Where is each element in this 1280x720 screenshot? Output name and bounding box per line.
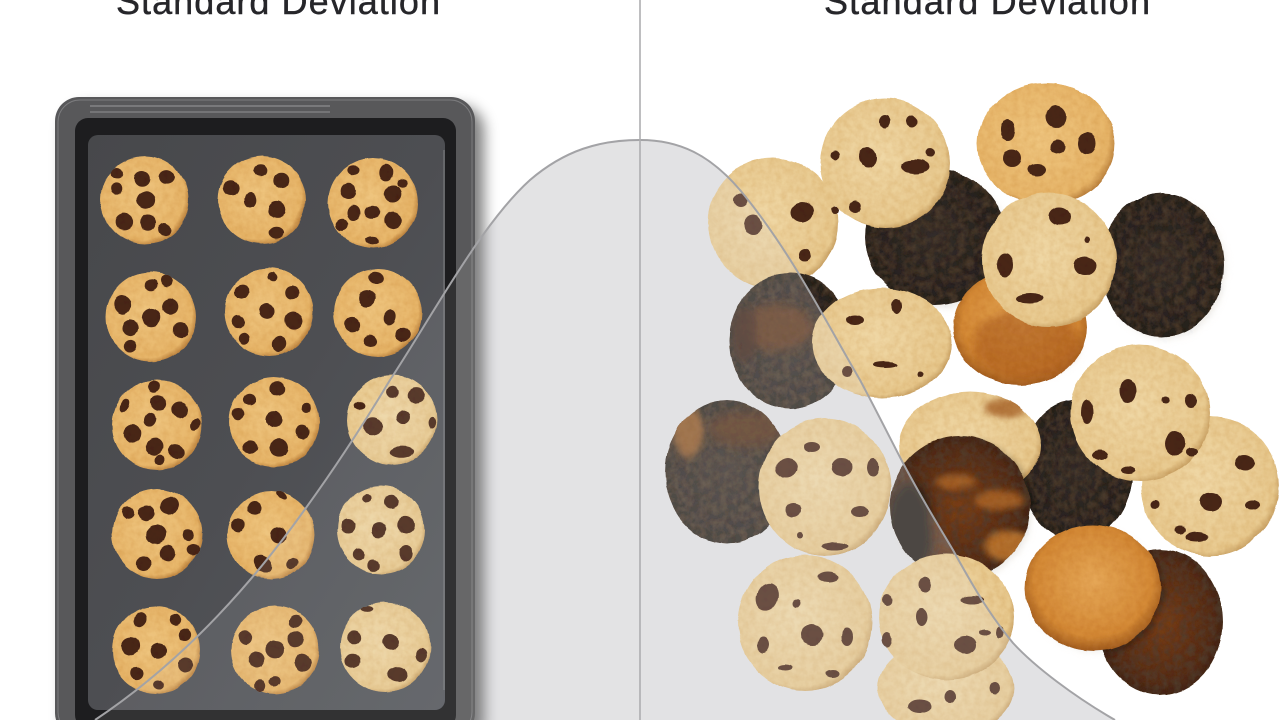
cookie: pale upper left [708,158,839,288]
cookie: burnt left [729,273,851,409]
cookie row 1 [101,156,418,248]
cookie: over-browned middle [953,269,1087,385]
panel: scattered inconsistent cookies [665,83,1279,720]
panel: baking tray with uniform cookies [55,97,484,720]
cookie: charred back [865,169,1011,310]
cookie: golden behind burnt [899,392,1041,480]
cookie row 2 [105,260,428,364]
cookie: pale bottom centre [878,554,1014,680]
cookie: golden top right [977,83,1115,205]
cookie: pale top [820,98,950,228]
cookie: pale centre [812,288,952,398]
cookie: pale centre right [982,193,1116,327]
cookie: pale far right [1141,416,1279,556]
cookie: pale bottom back [878,640,1014,720]
centre divider line [639,0,641,720]
cookie: pale bottom left [738,555,872,691]
cookie: orange lower right [1025,525,1164,655]
curve overlay on pile side [665,178,1014,720]
cookie row 3 [104,372,437,474]
cookie: pale centre left [759,418,891,556]
cookie: burnt lower right [1097,549,1223,695]
cookie: pale right [1070,345,1210,481]
cookie: charred far right [1100,193,1228,341]
cookie row 4 [112,479,425,587]
cookie row 5 [112,600,430,698]
cookie: burnt orange centre [887,436,1034,582]
bell curve outline [95,140,1115,720]
cookie: half-burnt left [665,400,789,544]
cookie: charred right centre [1021,399,1133,541]
curve overlay on tray side [97,241,480,720]
bell curve shaded area [95,140,1115,720]
